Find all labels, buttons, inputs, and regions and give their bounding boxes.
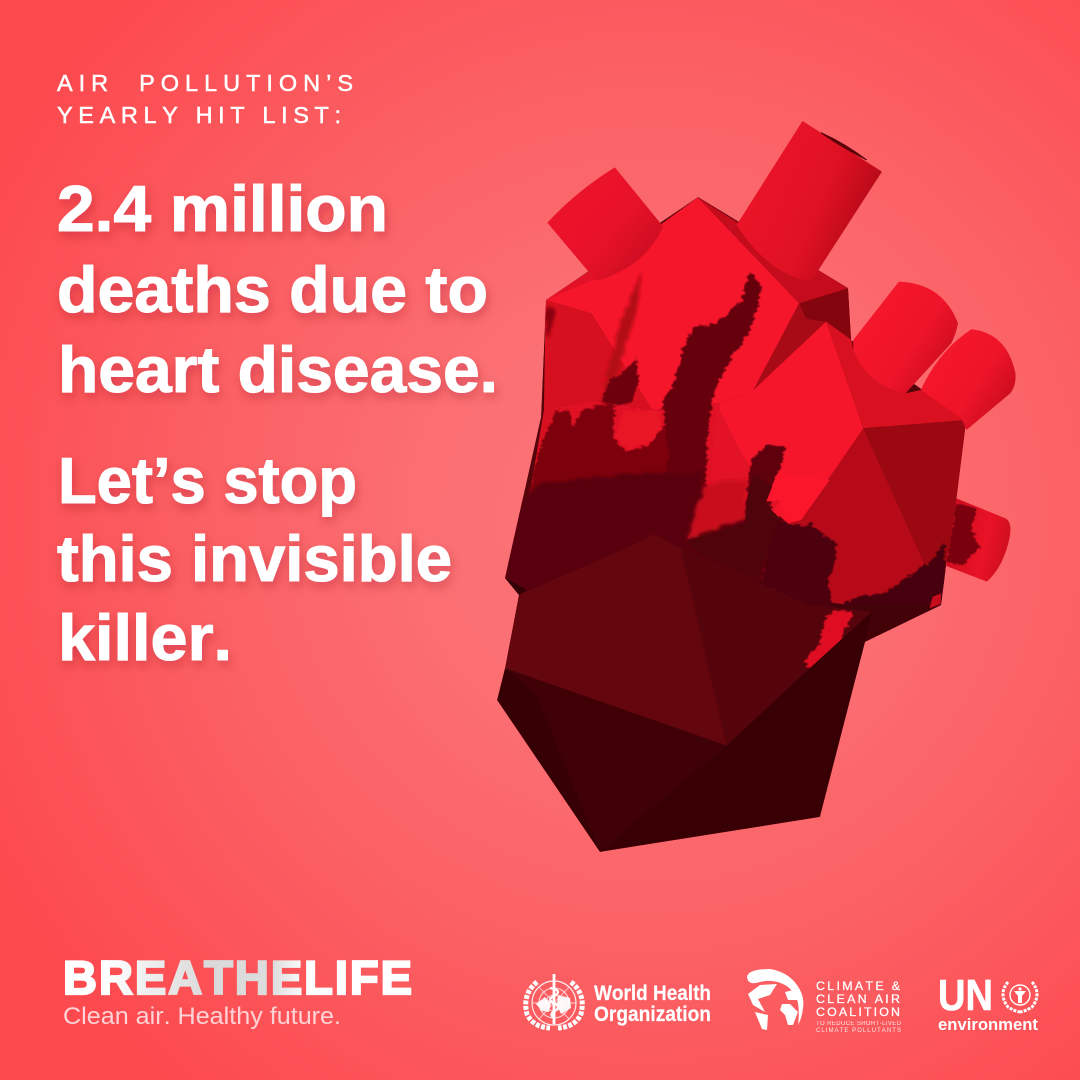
vessel top right: [737, 121, 882, 282]
WHO name: [594, 981, 711, 1026]
heart: back vessel small: [946, 498, 1010, 582]
left dark textured mass: [517, 403, 669, 540]
CCAC name: COALITION: [816, 1005, 900, 1019]
face big right: [760, 584, 872, 615]
heart: front vessels: [547, 121, 1016, 430]
main headline: call to action: this invisible: [57, 522, 452, 595]
small notch: [505, 578, 527, 595]
vessel right upper: [921, 329, 1016, 430]
face big left: [505, 535, 727, 746]
WHO name: Organization: [594, 1002, 711, 1026]
main headline: deaths: [57, 172, 498, 406]
CCAC strapline: CLIMATE POLLUTANTS: [816, 1028, 901, 1034]
smear small: [601, 358, 639, 405]
logo: UN Environment: [938, 971, 1038, 1034]
right chamber main facet: [720, 322, 863, 540]
CCAC name: [816, 979, 901, 1019]
body backing: [497, 197, 966, 852]
UN letters: UN: [938, 971, 993, 1020]
environment word: environment: [938, 1016, 1038, 1034]
bottom face right: [600, 612, 872, 852]
CCAC globe swoosh icon: [747, 969, 803, 1030]
smear third: [743, 444, 789, 566]
main headline: call to action: [57, 444, 452, 674]
main headline: call to action: Let’s stop: [58, 444, 357, 517]
BreatheLife wordmark: BREATHELIFE: [63, 951, 412, 1004]
small heading: YEARLY HIT LIST:: [57, 102, 341, 128]
dark lower right fringe: [828, 543, 946, 613]
vessel left: [547, 167, 663, 281]
bright blob kept out: [615, 410, 662, 450]
logo: Climate and Clean Air Coalition: [747, 969, 902, 1034]
CCAC strapline: TO REDUCE SHORT-LIVED: [816, 1021, 902, 1027]
CCAC name: CLIMATE &: [816, 979, 901, 993]
upper right dark facets: [754, 288, 852, 390]
left facet: [530, 300, 652, 492]
heart: lower facets: [497, 473, 946, 852]
CCAC name: CLEAN AIR: [816, 992, 900, 1006]
UN emblem: [1003, 982, 1037, 1012]
BreatheLife tagline: Clean air. Healthy future.: [63, 1003, 341, 1030]
WHO name: World Health: [594, 981, 711, 1005]
heart: body facets and smears, clipped to silhouette: [497, 197, 968, 852]
main headline: deaths: deaths due to: [57, 253, 488, 326]
BreatheLife logo: [63, 951, 412, 1030]
low-poly heart illustration: [497, 121, 1016, 852]
smear large dark plume: [659, 272, 762, 530]
smear streak faint: [601, 270, 644, 403]
right chamber side facet: [863, 420, 968, 577]
main headline: deaths: 2.4 million: [57, 172, 388, 245]
main headline: deaths: heart disease.: [58, 333, 498, 406]
WHO emblem: [526, 974, 582, 1028]
right chamber top facet: [826, 322, 968, 428]
heart: upper facets: [517, 197, 968, 607]
dark centre smear: [686, 473, 781, 580]
lower band: [558, 400, 720, 488]
bottom face left: [497, 668, 727, 852]
bright red fragment: [686, 480, 747, 540]
small heading: AIR POLLUTION’S: [57, 70, 353, 96]
dark mid left mass: [497, 473, 784, 603]
right chamber mid facet: [760, 428, 924, 607]
dark lower right band: [828, 577, 945, 642]
logo: World Health Organization: [526, 974, 711, 1028]
vessel right lower: [853, 282, 958, 393]
small heading: [57, 70, 353, 128]
bright red sliver: [804, 611, 853, 670]
main headline: call to action: killer.: [58, 601, 232, 674]
top back band facet: [698, 197, 848, 303]
CCAC strapline: [816, 1021, 902, 1034]
